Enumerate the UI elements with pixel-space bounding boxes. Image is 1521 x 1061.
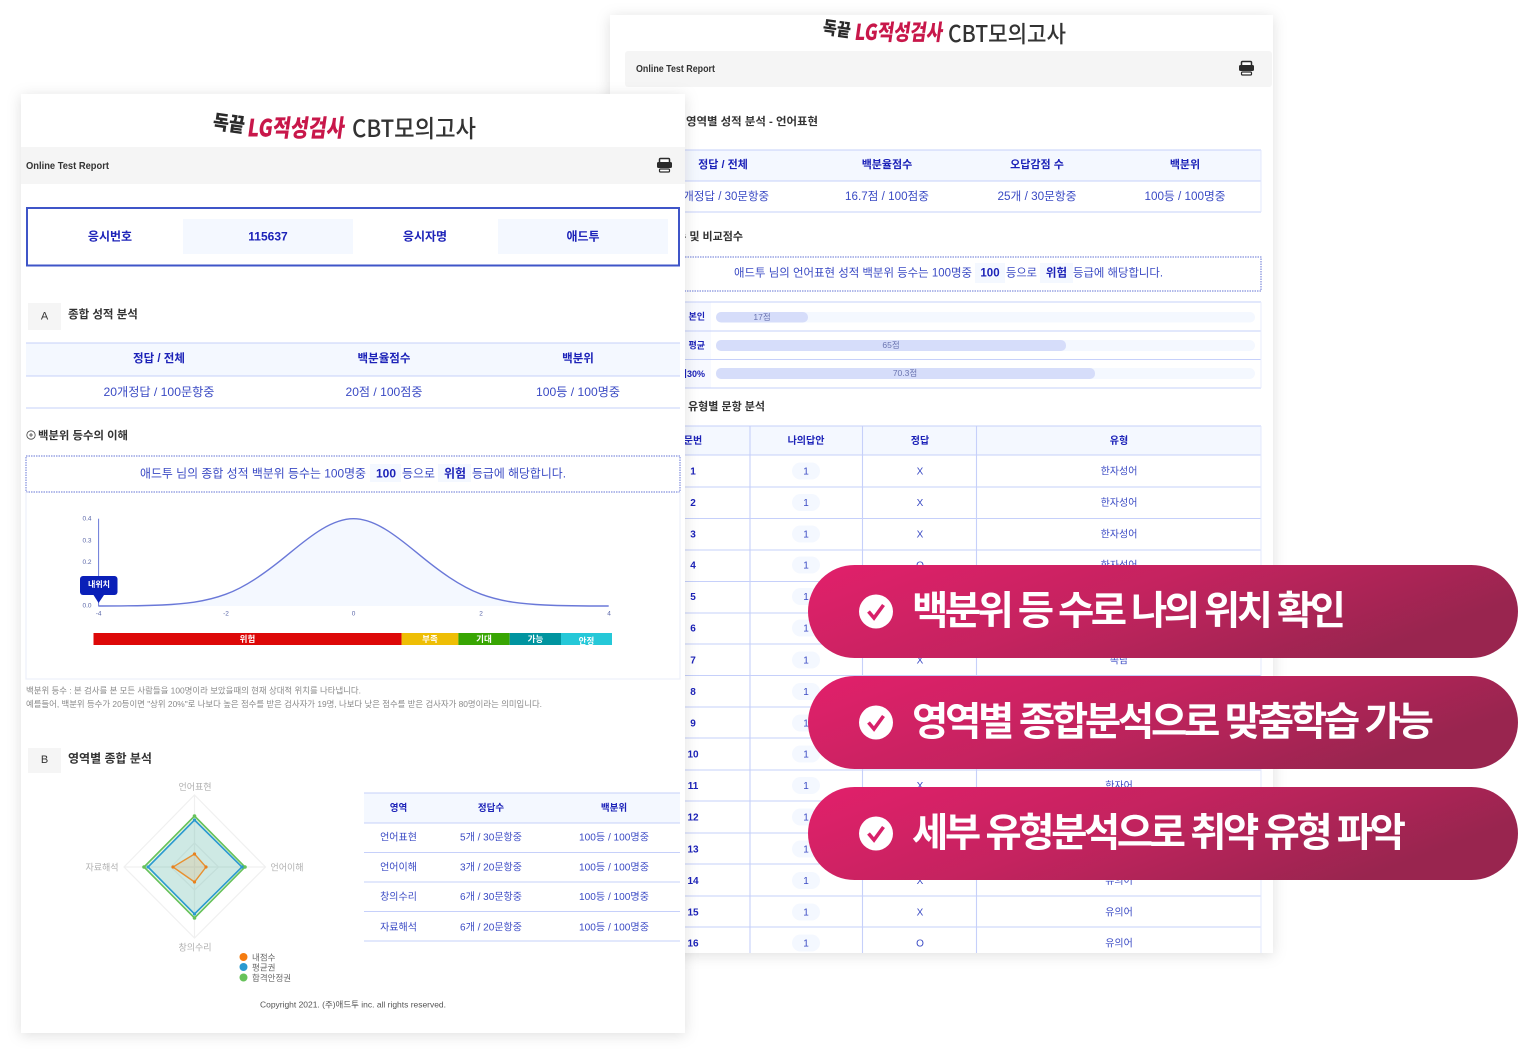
chart: normal distribution curve: 0.3 <box>82 538 92 544</box>
row 14: 유의어 <box>1105 875 1133 887</box>
table: area results: 5개 / 30문항중 <box>460 832 522 844</box>
table: overall score: 20개정답 / 100문항중 <box>104 385 214 399</box>
bar chart: score comparison: 65점 <box>882 340 900 350</box>
table: area results: 언어표현 <box>380 832 417 844</box>
table: area results: 6개 / 30문항중 <box>460 891 522 903</box>
row 6 <box>690 620 820 636</box>
row 3: X <box>917 530 924 540</box>
table: overall score: 정답 / 전체 <box>133 352 185 365</box>
chart: normal distribution curve: 0.2 <box>82 559 92 566</box>
row 3 <box>690 526 1137 542</box>
table: area results: 100등 / 100명중 <box>579 832 649 844</box>
callout pill: tailored study <box>808 676 1518 769</box>
radar chart: 창의수리 <box>178 942 212 952</box>
row 6: 1 <box>803 624 809 634</box>
row 1: 1 <box>690 466 696 478</box>
grade scale bar: 안정 <box>579 636 594 646</box>
row 2: 2 <box>690 498 696 509</box>
row 15: X <box>917 908 924 918</box>
callout: overall percentile statement: 등급에 해당합니다. <box>472 466 566 480</box>
section B badge: B <box>41 754 48 766</box>
table: question analysis: 문번 <box>684 435 702 447</box>
table: overall score: 백분율점수 <box>358 352 411 365</box>
footnote text: 예를들어, 백분위 등수가 20등이면 "상위 20%"로 나보다 높은 점수를 받은 검사자가 19명, 나보다 낮은 점수를 받은 검사자가 80명이라는 의미입니다. <box>26 699 542 709</box>
grade scale bar: 부족 <box>422 634 438 644</box>
radar legend: 평균권 <box>252 962 275 972</box>
back page logo: CBT모의고사 <box>948 15 1066 49</box>
callout pill: weak type <box>808 787 1518 880</box>
table: area results: 100등 / 100명중 <box>579 891 649 903</box>
radar chart: 언어이해 <box>270 862 304 872</box>
chart: normal distribution curve <box>82 516 611 618</box>
row 2: 한자성어 <box>1101 497 1137 509</box>
row 5: 5 <box>690 592 696 603</box>
panel: back report page <box>610 13 1273 953</box>
table: area results: 언어이해 <box>380 860 417 874</box>
callout: percentile statement: 등급에 해당합니다. <box>1073 266 1163 280</box>
table: area results: 창의수리 <box>380 891 417 903</box>
row 11: X <box>917 781 924 792</box>
table: overall score: 20점 / 100점중 <box>346 385 422 399</box>
row 8 <box>690 683 820 700</box>
panel: distribution chart frame <box>26 492 680 679</box>
icon: printer back <box>1239 62 1254 75</box>
table: area score summary: 100등 / 100명중 <box>1144 190 1226 203</box>
row 7: X <box>917 656 924 666</box>
table: area score summary <box>626 150 1261 212</box>
bar chart: score comparison: 본인 <box>688 312 705 322</box>
row 13: 1 <box>803 844 809 856</box>
heading: question type analysis: 세부 유형별 문항 분석 <box>665 399 765 413</box>
row 13: 13 <box>687 844 699 856</box>
callout: overall percentile statement: 애드투 님의 종합 성적 백분위 등수는 100명중 <box>140 466 366 480</box>
callout pill: weak type: 세부 유형분석으로 취약 유형 파악 <box>912 802 1406 858</box>
table: area results: 100등 / 100명중 <box>579 922 649 934</box>
icon: check <box>859 816 893 850</box>
row 11: 한자어 <box>1105 780 1133 792</box>
callout: overall percentile statement: 100 <box>376 466 396 480</box>
candidate info box: 115637 <box>248 230 288 244</box>
row 7: 속담 <box>1110 654 1128 666</box>
row 6: 6 <box>690 624 696 634</box>
row 15: 15 <box>687 908 699 918</box>
bar chart: score comparison <box>640 302 1261 388</box>
callout: overall percentile statement <box>26 456 680 492</box>
table: area results: 100등 / 100명중 <box>579 862 649 874</box>
row 11: 1 <box>803 781 809 792</box>
grade scale bar <box>94 633 612 646</box>
callout pill: percentile position: 백분위 등 수로 나의 위치 확인 <box>912 580 1346 636</box>
row 16: 16 <box>687 938 699 950</box>
row 15 <box>687 904 1133 920</box>
row 9: 1 <box>803 718 809 730</box>
footnote text <box>26 686 542 709</box>
row 4: 한자성어 <box>1101 560 1137 572</box>
row 11: 11 <box>688 781 699 792</box>
table: area score summary: 백분율점수 <box>862 158 912 171</box>
chart: normal distribution curve: -2 <box>223 610 229 618</box>
table: area score summary: 5개정답 / 30문항중 <box>677 190 769 203</box>
chart: normal distribution curve: 0.4 <box>82 516 92 522</box>
chart: normal distribution curve: 0.0 <box>82 602 92 610</box>
table: overall score <box>26 343 680 408</box>
table: area results: 영역 <box>390 802 407 814</box>
table: area score summary: 정답 / 전체 <box>698 158 748 171</box>
callout pill: tailored study: 영역별 종합분석으로 맞춤학습 가능 <box>912 690 1434 748</box>
heading: percentile understanding: 백분위 등수의 이해 <box>38 429 128 442</box>
table: question analysis: 정답 <box>911 434 929 447</box>
row 12 <box>687 808 820 826</box>
front page logo: LG적성검사 <box>246 109 348 143</box>
row 14: 14 <box>687 876 699 887</box>
row 14: 1 <box>803 876 809 887</box>
row 14: X <box>917 876 924 887</box>
table: area score summary: 16.7점 / 100점중 <box>845 190 929 203</box>
callout: overall percentile statement: 위험 <box>444 466 466 480</box>
row 4 <box>690 556 1137 574</box>
candidate info box: 응시자명 <box>403 230 447 244</box>
callout pill: percentile position <box>808 565 1518 658</box>
back page logo: LG적성검사 <box>853 15 946 47</box>
radar legend <box>240 952 291 983</box>
callout: percentile statement: 등으로 <box>1006 266 1037 280</box>
back page header bar: Online Test Report <box>636 64 716 75</box>
row 4: 1 <box>803 560 809 572</box>
row 7: 7 <box>690 656 696 666</box>
back page header bar <box>625 51 1272 87</box>
callout: percentile statement: 애드투 님의 언어표현 성적 백분위 등수는 100명중 <box>734 266 972 280</box>
row 8: 8 <box>690 687 696 698</box>
radar legend: 합격안정권 <box>252 973 291 983</box>
row 1: 1 <box>803 466 809 478</box>
heading: percentile and comparison: 백분위 등수 및 비교점수 <box>633 230 743 243</box>
table: area results: 자료해석 <box>380 920 417 934</box>
row 1: X <box>917 466 924 478</box>
table: area score summary: 백분위 <box>1170 158 1200 171</box>
row 1: 한자성어 <box>1101 466 1137 478</box>
back page logo: 독끝 <box>821 13 853 43</box>
row 16: O <box>916 938 924 950</box>
row 2: X <box>917 498 924 509</box>
grade scale bar: 위험 <box>240 634 255 644</box>
chart: normal distribution curve: 0 <box>352 610 356 618</box>
radar chart: 자료해석 <box>85 862 119 872</box>
row 15: 유의어 <box>1105 906 1133 918</box>
row 10: 10 <box>687 750 699 760</box>
row 7 <box>690 652 1128 668</box>
table: area results: 정답수 <box>478 802 504 814</box>
row 11 <box>688 777 1133 794</box>
icon: check <box>859 706 893 740</box>
section A badge <box>28 303 61 330</box>
front page header bar <box>21 147 685 184</box>
chart: normal distribution curve: 2 <box>479 610 483 618</box>
front page logo: 독끝 <box>211 105 247 139</box>
section B badge <box>28 748 61 773</box>
row 5: 1 <box>803 592 809 603</box>
bar chart: score comparison: 평균 <box>688 340 705 350</box>
marker: my position <box>80 576 118 603</box>
row 10: 1 <box>803 750 809 760</box>
row 9 <box>690 714 820 732</box>
row 2: 1 <box>803 498 809 509</box>
candidate info box: 애드투 <box>566 230 600 244</box>
row 3: 1 <box>803 530 809 540</box>
table: area results: 백분위 <box>601 802 627 814</box>
table: area score summary: 오답감점 수 <box>1010 158 1064 171</box>
front page logo: CBT모의고사 <box>352 109 476 144</box>
bar chart: score comparison: 17점 <box>753 312 771 322</box>
table: question analysis: 유형 <box>1110 434 1128 447</box>
candidate info box <box>27 208 679 266</box>
row 13 <box>687 840 820 858</box>
back page logo <box>821 13 1066 49</box>
candidate info box: 응시번호 <box>88 230 132 244</box>
row 14 <box>687 872 1133 889</box>
row 16: 1 <box>803 938 809 950</box>
footnote text: 백분위 등수 : 본 검사를 본 모든 사람들을 100명이라 보았을때의 현재 상대적 위치를 나타냅니다. <box>26 686 361 696</box>
row 16: 유의어 <box>1105 938 1133 950</box>
row 5 <box>690 588 820 605</box>
marker: my position: 내위치 <box>88 579 110 589</box>
row 2 <box>690 494 1137 511</box>
copyright: Copyright 2021. (주)애드투 inc. all rights reserved. <box>260 1000 446 1010</box>
heading: section A: 종합 성적 분석 <box>68 307 138 321</box>
row 3: 3 <box>690 530 696 540</box>
table: overall score: 백분위 <box>562 352 594 365</box>
icon: printer front <box>657 158 672 172</box>
callout: percentile statement: 100 <box>980 268 1000 280</box>
row 8: 1 <box>803 687 809 698</box>
table: area results <box>364 793 680 941</box>
grade scale bar: 기대 <box>476 634 492 644</box>
row 4: O <box>916 560 924 572</box>
row 12: 12 <box>687 812 699 824</box>
front page logo <box>211 105 476 144</box>
bar chart: score comparison: 상위30% <box>670 368 705 379</box>
radar chart <box>85 781 304 952</box>
table: question analysis <box>640 426 1261 953</box>
table: overall score: 100등 / 100명중 <box>536 385 620 399</box>
panel: front report page <box>21 94 685 1033</box>
chart: normal distribution curve: -4 <box>96 610 102 618</box>
table: area results: 6개 / 20문항중 <box>460 922 522 934</box>
heading: section analysis: 영역별 성적 분석 - 언어표현 <box>686 114 818 128</box>
table: area score summary: 25개 / 30문항중 <box>998 190 1076 203</box>
row 10 <box>687 746 820 762</box>
table: area results: 3개 / 20문항중 <box>460 862 522 874</box>
bar chart: score comparison: 70.3점 <box>893 368 917 378</box>
row 12: 1 <box>803 812 809 824</box>
icon: check <box>859 594 893 628</box>
row 3: 한자성어 <box>1101 528 1137 540</box>
row 15: 1 <box>803 908 809 918</box>
row 7: 1 <box>803 656 809 666</box>
chart: normal distribution curve: 4 <box>607 610 611 618</box>
row 9: 9 <box>690 718 696 730</box>
radar legend: 내점수 <box>252 952 276 962</box>
callout: overall percentile statement: 등으로 <box>402 466 435 480</box>
section A badge: A <box>41 310 49 322</box>
row 1 <box>690 462 1137 480</box>
radar chart: 언어표현 <box>178 781 212 792</box>
callout: percentile statement <box>640 257 1261 291</box>
front page header bar: Online Test Report <box>26 161 110 172</box>
heading: section B: 영역별 종합 분석 <box>68 750 152 766</box>
callout: percentile statement: 위험 <box>1046 266 1067 280</box>
row 16 <box>687 934 1133 952</box>
table: question analysis: 나의답안 <box>788 434 824 447</box>
grade scale bar: 가능 <box>528 634 543 644</box>
row 4: 4 <box>690 560 696 572</box>
